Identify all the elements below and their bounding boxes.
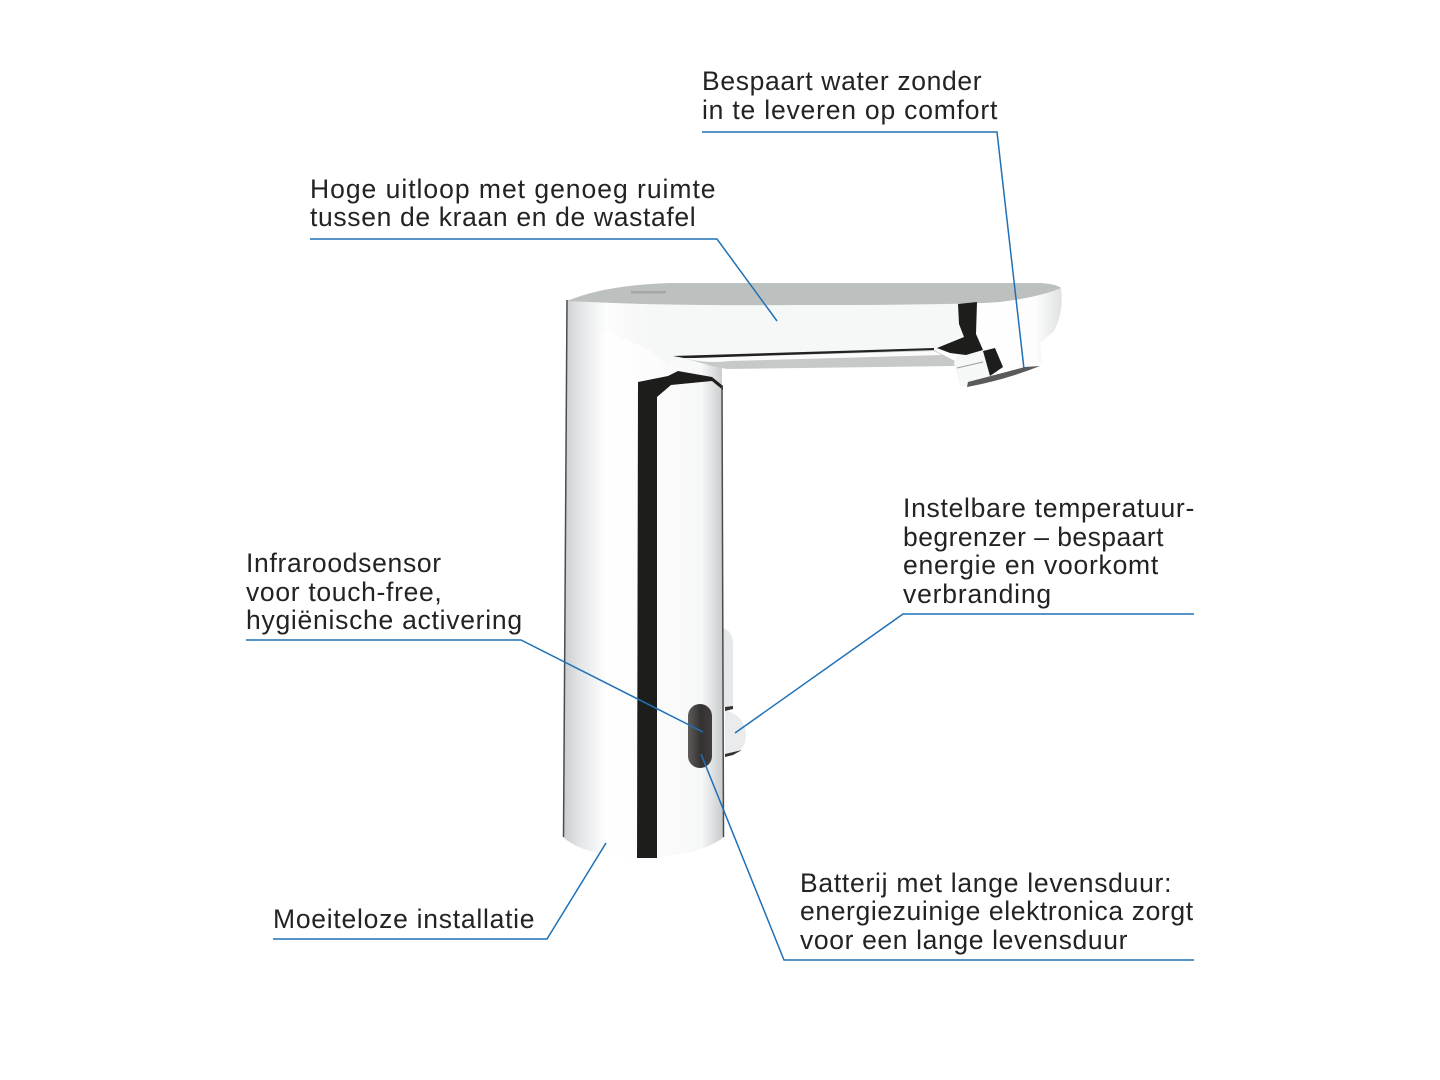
leader line: installation (273, 843, 606, 939)
reflection: spout dark band (937, 302, 983, 355)
text: water saving (702, 66, 998, 124)
text: installation: Moeiteloze installatie (273, 904, 535, 934)
neck dark reflection (638, 371, 723, 440)
text: infrared sensor (246, 548, 523, 635)
logo mark (631, 291, 666, 294)
infrared sensor window (688, 704, 712, 768)
text: high spout: Hoge uitloop met genoeg ruimte (310, 174, 717, 204)
text: high spout: tussen de kraan en de wastafel (310, 202, 696, 232)
spout underside dark line (673, 348, 934, 358)
text: temperature limiter: energie en voorkomt (903, 550, 1159, 580)
rear mounting plate (723, 628, 746, 757)
aerator seam (957, 362, 983, 368)
faucet body (563, 300, 724, 858)
text: battery: Batterij met lange levensduur: (800, 868, 1172, 898)
text: temperature limiter: begrenzer – bespaart (903, 522, 1164, 552)
body dark reflection stripe (637, 385, 657, 858)
spout top surface (567, 283, 1061, 305)
text: infrared sensor: Infraroodsensor (246, 548, 442, 578)
text: high spout (310, 174, 717, 232)
leader line: battery (701, 754, 1194, 960)
text: battery: energiezuinige elektronica zorgt (800, 896, 1194, 926)
spout underside highlight (684, 351, 942, 362)
text: temperature limiter (903, 493, 1195, 608)
spout tip (975, 288, 1062, 376)
text: battery (800, 868, 1194, 954)
leader line: temperature limiter (735, 614, 1194, 733)
text: infrared sensor: hygiënische activering (246, 605, 523, 635)
underside of spout (680, 350, 957, 369)
text: water saving: in te leveren op comfort (702, 94, 998, 124)
body edges (564, 300, 724, 837)
leader line: water saving (702, 132, 1024, 369)
reflection: aerator dark band (983, 348, 1003, 376)
aerator outlet (967, 366, 1040, 387)
spout (567, 288, 1062, 386)
leader line: sensor (246, 640, 703, 732)
text: temperature limiter: verbranding (903, 578, 1052, 608)
text: water saving: Bespaart water zonder (702, 66, 982, 96)
text: temperature limiter: Instelbare temperatuur- (903, 493, 1195, 523)
text: battery: voor een lange levensduur (800, 924, 1128, 954)
text: infrared sensor: voor touch-free, (246, 576, 442, 606)
leader line: high spout (310, 239, 777, 321)
